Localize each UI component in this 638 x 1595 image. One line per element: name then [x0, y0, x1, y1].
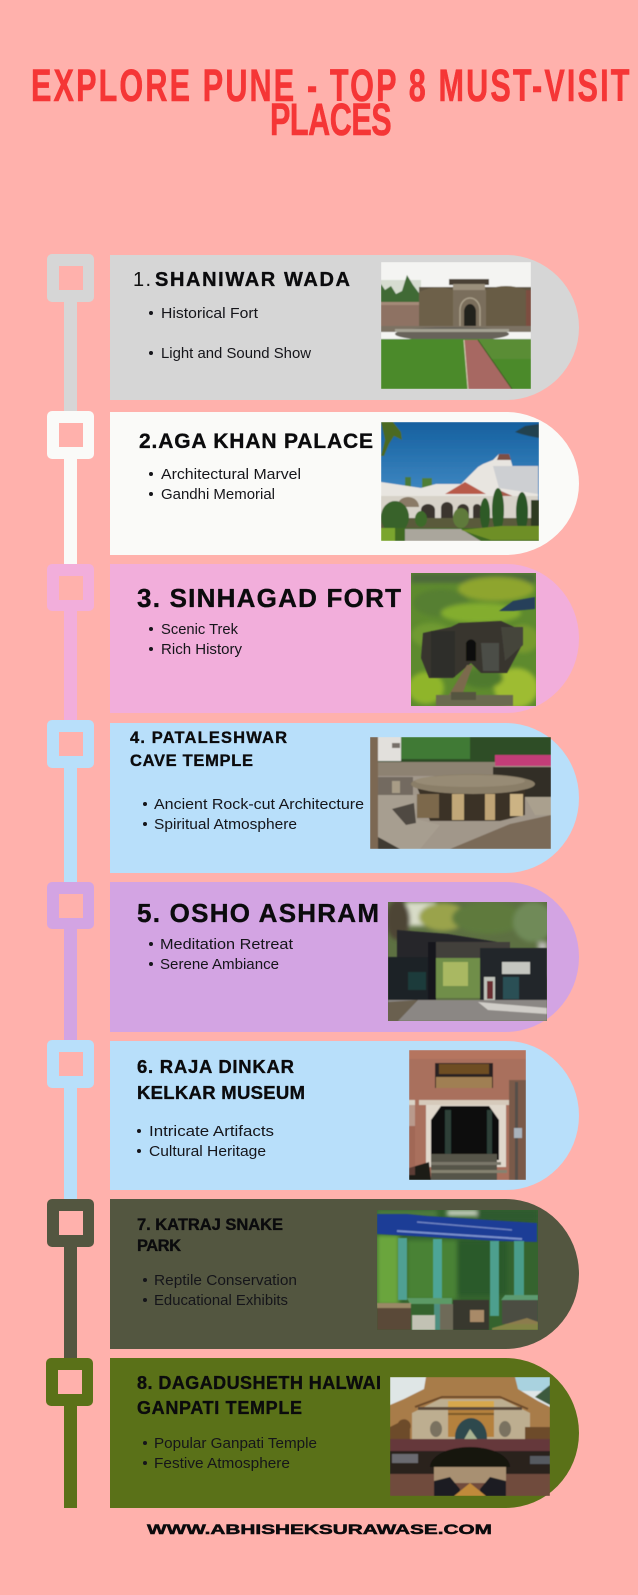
heading 5: 5. OSHO ASHRAM [137, 898, 379, 928]
photo: Sinhagad Fort [411, 573, 536, 706]
title: PLACES [270, 95, 392, 146]
heading 6: KELKAR MUSEUM [137, 1082, 305, 1103]
heading 4: 4. PATALESHWAR [130, 729, 287, 747]
photo: Pataleshwar Cave Temple [370, 737, 551, 849]
bullets 2: Architectural Marvel [161, 467, 301, 483]
bullets 8 [143, 1436, 317, 1472]
heading 7 [137, 1216, 283, 1255]
bullets 4 [143, 797, 364, 833]
heading 2: 2.AGA KHAN PALACE [139, 430, 373, 453]
photo: Shaniwar Wada gate [381, 262, 531, 389]
panel 1: Shaniwar Wada [110, 255, 579, 400]
panel 6: Raja Dinkar Kelkar Museum [110, 1041, 579, 1190]
footer website: WWW.ABHISHEKSURAWASE.COM [147, 1521, 492, 1537]
bullets 7: Educational Exhibits [154, 1293, 288, 1309]
bullets 7: Reptile Conservation [154, 1273, 297, 1289]
timeline node 1 [47, 254, 94, 412]
heading 8: GANPATI TEMPLE [137, 1398, 302, 1418]
heading 7: 7. KATRAJ SNAKE [137, 1216, 283, 1234]
heading 7: PARK [137, 1237, 181, 1255]
photo: Aga Khan Palace [381, 422, 539, 541]
bullets 3: Rich History [161, 642, 243, 658]
bullets 7 [143, 1273, 297, 1309]
panel 8: Dagadusheth Halwai Ganpati Temple [110, 1358, 579, 1508]
bullets 6 [137, 1124, 274, 1160]
heading 1: SHANIWAR WADA [155, 269, 350, 291]
heading 8: 8. DAGADUSHETH HALWAI [137, 1373, 381, 1393]
bullets 1: Light and Sound Show [161, 346, 312, 362]
photo: Katraj Snake Park gate [377, 1210, 538, 1330]
panel 2: Aga Khan Palace [110, 412, 579, 555]
bullets 4: Ancient Rock-cut Architecture [154, 797, 364, 813]
heading 3: 3. SINHAGAD FORT [137, 583, 401, 613]
bullets 1 [149, 306, 312, 362]
panel 4: Pataleshwar Cave Temple [110, 723, 579, 873]
heading 8 [137, 1373, 381, 1418]
heading 6: 6. RAJA DINKAR [137, 1056, 294, 1077]
bullets 2: Gandhi Memorial [161, 487, 275, 503]
title [31, 61, 630, 146]
bullets 6: Cultural Heritage [149, 1144, 266, 1160]
bullets 8: Festive Atmosphere [154, 1456, 290, 1472]
timeline node 4 [47, 720, 94, 883]
bullets 1: Historical Fort [161, 306, 258, 322]
bullets 4: Spiritual Atmosphere [154, 817, 297, 833]
heading 4: CAVE TEMPLE [130, 752, 253, 770]
panel 7: Katraj Snake Park [110, 1199, 579, 1349]
heading 6 [137, 1056, 305, 1103]
timeline node 3 [47, 564, 94, 721]
panel 5: Osho Ashram [110, 882, 579, 1032]
timeline node 6 [47, 1040, 94, 1200]
bullets 6: Intricate Artifacts [149, 1124, 274, 1140]
panel 3: Sinhagad Fort [110, 564, 579, 713]
photo: Dagadusheth Ganpati Temple [390, 1377, 550, 1496]
bullets 5: Meditation Retreat [160, 937, 293, 953]
heading 4 [130, 729, 287, 770]
timeline node 8 [46, 1358, 93, 1508]
bullets 5 [149, 937, 293, 973]
bullets 3: Scenic Trek [161, 622, 239, 638]
bullets 2 [149, 467, 301, 503]
timeline node 2 [47, 411, 94, 565]
title: EXPLORE PUNE - TOP 8 MUST-VISIT [31, 61, 630, 112]
bullets 3 [149, 622, 243, 658]
heading 1: 1. [133, 269, 151, 291]
photo: Osho Ashram gate [388, 902, 547, 1021]
timeline node 5 [47, 882, 94, 1040]
timeline node 7 [47, 1199, 94, 1359]
photo: Kelkar Museum entrance [409, 1050, 526, 1180]
bullets 8: Popular Ganpati Temple [154, 1436, 317, 1452]
bullets 5: Serene Ambiance [160, 957, 279, 973]
